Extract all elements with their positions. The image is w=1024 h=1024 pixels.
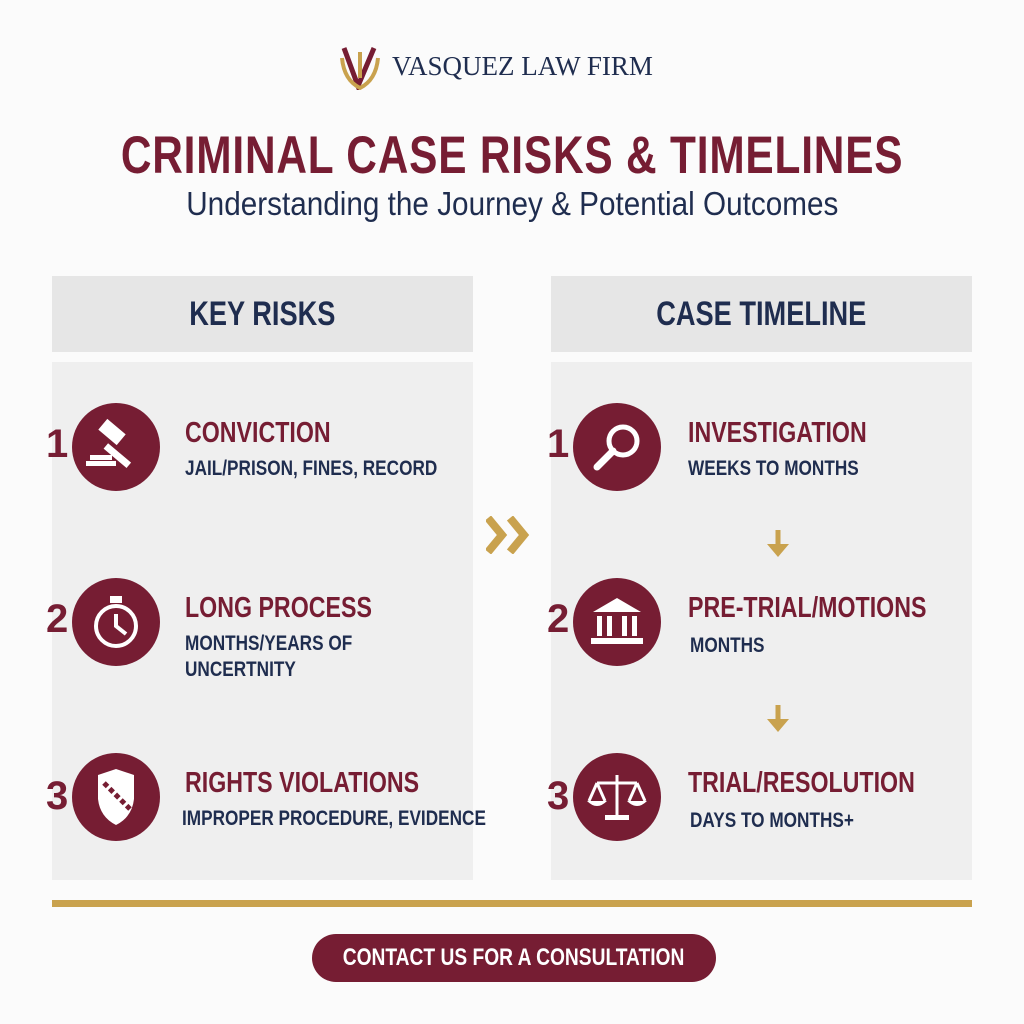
- arrow: chevrons: [486, 516, 530, 554]
- button: contact: [312, 934, 716, 982]
- subtitle: Understanding the Journey & Potential Outcomes: [186, 185, 838, 222]
- item: long process: MONTHS/YEARS OF: [185, 631, 352, 655]
- item: rights violations: [46, 753, 486, 841]
- logo: [340, 47, 653, 90]
- arrow: down 1: [767, 530, 789, 557]
- step: trial: DAYS TO MONTHS+: [690, 808, 854, 832]
- step: trial: [547, 753, 915, 841]
- header: key risks: KEY RISKS: [189, 294, 336, 332]
- item: conviction: CONVICTION: [185, 417, 331, 449]
- panel: key risks: [52, 362, 473, 880]
- item: long process: 2: [46, 597, 68, 641]
- item: conviction: [46, 403, 437, 491]
- item: conviction: 1: [46, 422, 68, 466]
- icon: gavel: [72, 403, 160, 491]
- icon: scales: [573, 753, 661, 841]
- item: long process: [46, 578, 372, 681]
- step: investigation: [547, 403, 867, 491]
- logo: VASQUEZ LAW FIRM: [392, 51, 653, 81]
- button: contact: CONTACT US FOR A CONSULTATION: [343, 944, 685, 971]
- step: investigation: WEEKS TO MONTHS: [688, 456, 859, 480]
- step: trial: 3: [547, 774, 569, 818]
- header: key risks: [52, 276, 473, 352]
- arrow: down 2: [767, 705, 789, 732]
- divider gold line: [52, 900, 972, 907]
- item: rights violations: 3: [46, 774, 68, 818]
- step: pre-trial: PRE-TRIAL/MOTIONS: [688, 592, 926, 624]
- step: investigation: 1: [547, 422, 569, 466]
- step: investigation: INVESTIGATION: [688, 417, 867, 449]
- header: case timeline: [551, 276, 972, 352]
- step: pre-trial: 2: [547, 597, 569, 641]
- step: trial: TRIAL/RESOLUTION: [688, 767, 915, 799]
- header: case timeline: CASE TIMELINE: [656, 294, 867, 332]
- icon: stopwatch: [72, 578, 160, 666]
- panel: case timeline: [551, 362, 972, 880]
- icon: shield with chain: [72, 753, 160, 841]
- item: rights violations: RIGHTS VIOLATIONS: [185, 767, 419, 799]
- icon: courthouse: [573, 578, 661, 666]
- icon: logo mark: [340, 47, 380, 90]
- item: rights violations: IMPROPER PROCEDURE, EVIDENCE: [182, 806, 486, 830]
- step: pre-trial: [547, 578, 926, 666]
- icon: magnifier: [573, 403, 661, 491]
- panel: key risks: UNCERTNITY: [185, 657, 296, 681]
- title: CRIMINAL CASE RISKS & TIMELINES: [121, 126, 903, 184]
- item: long process: LONG PROCESS: [185, 592, 372, 624]
- step: pre-trial: MONTHS: [690, 633, 765, 657]
- item: conviction: JAIL/PRISON, FINES, RECORD: [185, 456, 437, 480]
